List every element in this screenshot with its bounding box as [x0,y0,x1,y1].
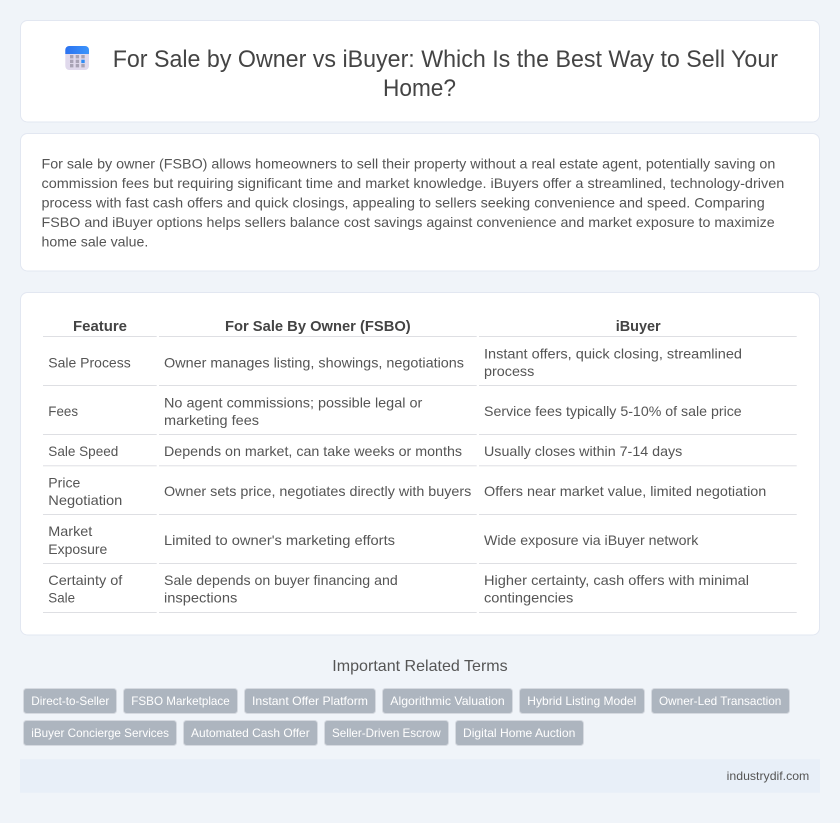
text block: introduction paragraph: commission fees but requiring significant time and market knowledge. iBuyers offer a streamlined, technology-driven [42,175,784,191]
table row: price negotiation: Owner sets price, negotiates directly with buyers [164,483,471,499]
related terms tags: Owner-Led Transaction [659,694,781,708]
table row: price negotiation: Price [48,474,81,490]
table row: sale process: Owner manages listing, showings, negotiations [164,354,464,370]
table row: sale speed: Usually closes within 7-14 days [484,443,682,459]
table row: fees: No agent commissions; possible legal or [164,394,423,410]
related terms tags: FSBO Marketplace [131,694,230,708]
text block: introduction paragraph: home sale value. [42,234,148,250]
icon: calendar [65,46,89,70]
table row: sale process: process [484,363,534,379]
text block: introduction paragraph: For sale by owner (FSBO) allows homeowners to sell their property without a real estate agent, potentially saving on [42,155,775,171]
table row: fees [43,394,797,435]
panel: header [20,20,820,122]
related terms tags: Direct-to-Seller [31,694,109,708]
table row: fees: marketing fees [164,412,259,428]
related terms tags: Hybrid Listing Model [527,694,636,708]
table row: sale speed: Depends on market, can take weeks or months [164,443,462,459]
related terms tags: Automated Cash Offer [191,726,310,740]
table row: price negotiation: Negotiation [48,492,122,508]
text block: introduction paragraph: process with fast cash offers and quick closings, appealing to sellers seeking convenience and speed. Comparing [42,194,765,210]
table row: price negotiation: Offers near market value, limited negotiation [484,483,766,499]
table row: sale process: Instant offers, quick closing, streamlined [484,345,742,361]
table row: sale speed: Sale Speed [48,443,118,459]
table row: sale speed [43,443,797,466]
table header row: iBuyer [616,318,661,335]
title: Home? [383,75,456,102]
table row: fees: Fees [48,403,78,419]
table row: certainty of sale: contingencies [484,590,573,606]
table header row: Feature [73,318,127,335]
table header row [43,318,797,337]
title: For Sale by Owner vs iBuyer: Which Is the Best Way to Sell Your [113,46,778,73]
table row: certainty of sale: Certainty of [48,572,122,588]
table row: market exposure [43,523,797,564]
related terms tags: Algorithmic Valuation [390,694,505,708]
table row: certainty of sale: inspections [164,590,237,606]
table row: certainty of sale: Higher certainty, cash offers with minimal [484,572,749,588]
table row: market exposure: Market [48,523,92,539]
table row: certainty of sale [43,572,797,613]
table row: fees: Service fees typically 5-10% of sale price [484,403,742,419]
related terms tags: Instant Offer Platform [252,694,368,708]
related terms tags: Digital Home Auction [463,726,575,740]
text block: introduction paragraph: FSBO and iBuyer options helps sellers balance cost savings against convenience and market exposure to maximize [42,214,775,230]
related terms tags: iBuyer Concierge Services [31,726,169,740]
panel: comparison table [20,292,820,635]
table row: market exposure: Limited to owner's marketing efforts [164,532,395,548]
table row: sale process: Sale Process [48,354,131,370]
footer: industrydif.com [727,769,809,783]
table row: certainty of sale: Sale depends on buyer financing and [164,572,398,588]
related terms tags [24,688,790,746]
table row: market exposure: Exposure [48,541,108,557]
heading: important related terms: Important Related Terms [332,658,508,675]
table row: market exposure: Wide exposure via iBuyer network [484,532,699,548]
title [113,46,778,102]
table row: price negotiation [43,474,797,515]
related terms tags: Seller-Driven Escrow [332,726,441,740]
table header row: For Sale By Owner (FSBO) [225,318,411,335]
table row: certainty of sale: Sale [48,590,75,606]
footer [20,759,820,793]
text block: introduction paragraph [42,155,784,250]
panel: introduction [20,134,820,271]
table row: sale process [43,345,797,386]
